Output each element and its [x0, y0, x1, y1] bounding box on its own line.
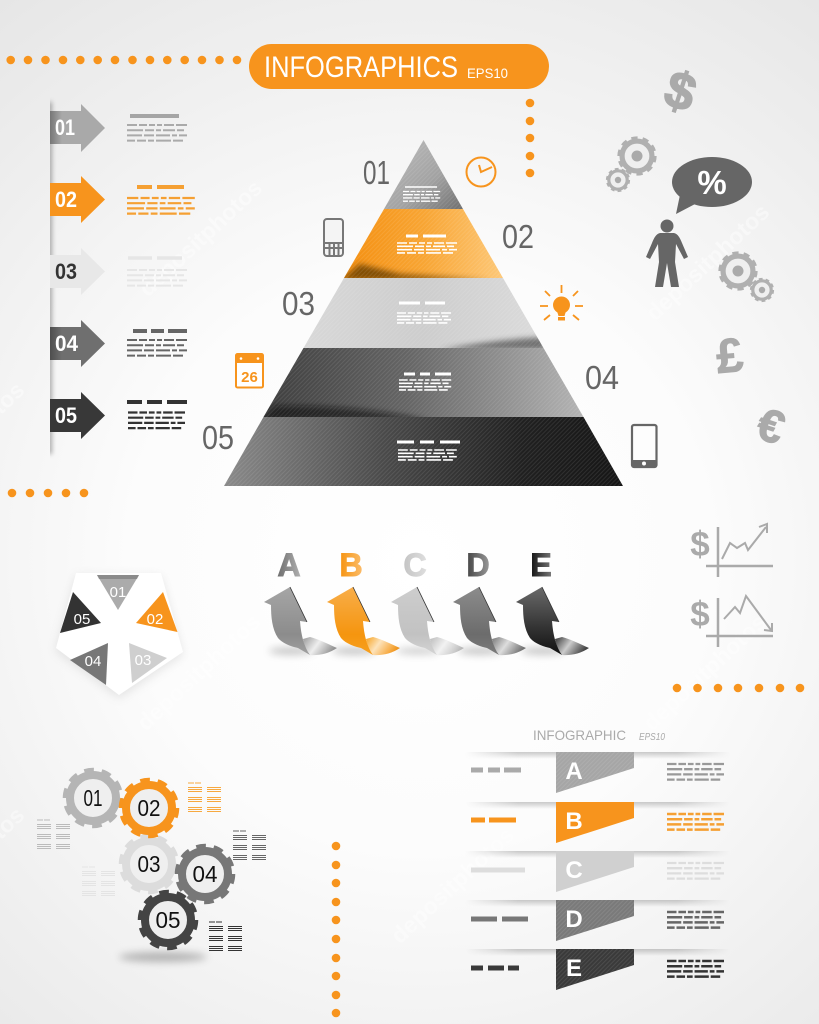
- panel: gears: [37, 770, 266, 962]
- arrow B: [327, 587, 400, 655]
- row E: [471, 949, 724, 990]
- gear 03: [122, 836, 176, 892]
- arrow 01: [50, 104, 105, 152]
- row B: [471, 802, 724, 843]
- gear text block 02: [188, 783, 221, 812]
- gear 04: 04: [192, 861, 218, 887]
- dotted line: top left: [6, 56, 241, 64]
- text block 03: [127, 258, 187, 286]
- gear 05: [140, 892, 196, 948]
- icon: light bulb: [540, 285, 583, 320]
- arrow 04: [50, 320, 105, 367]
- dotted line: right middle: [673, 684, 804, 692]
- icon: chart falling: [690, 595, 773, 647]
- title pill: INFOGRAPHICS: [264, 51, 458, 84]
- watermark text: depositphotos: [638, 609, 771, 736]
- icon: calendar: [236, 354, 263, 388]
- arrow 02: 02: [55, 187, 77, 212]
- icon: mobile phone: [324, 219, 343, 256]
- row D: D: [565, 906, 583, 933]
- icon: tablet: [632, 425, 656, 467]
- pyramid chart: [224, 140, 623, 486]
- panel: numbered arrow list: [47, 102, 195, 454]
- icon: speech bubble with percent: [672, 157, 752, 214]
- watermark text: depositphotos: [388, 393, 521, 520]
- icon: gears right: [720, 253, 773, 301]
- arrow D: [453, 587, 526, 655]
- pyramid label 03: 03: [282, 285, 315, 322]
- row A: A: [565, 758, 583, 785]
- pyramid label 01: 01: [363, 154, 390, 191]
- icon: pound: £: [714, 329, 746, 384]
- icon: chart rising: [690, 524, 773, 577]
- row B: B: [565, 808, 583, 835]
- arrow C: [391, 587, 464, 655]
- panel: letter arrows: [264, 547, 589, 655]
- gear 05: 05: [156, 907, 180, 933]
- segment 01: 01: [110, 584, 126, 601]
- gear text block 04: [233, 831, 266, 860]
- arrow 03: [50, 248, 105, 295]
- gear text block 05: [209, 922, 242, 950]
- icon: euro: €: [751, 397, 791, 454]
- arrow 05: [50, 392, 105, 439]
- letter A: A: [277, 547, 301, 583]
- row C: [471, 851, 724, 892]
- icon: speech bubble with percent: %: [697, 164, 727, 201]
- segment 03: 03: [135, 652, 151, 669]
- arrow 03: 03: [55, 259, 77, 284]
- segment 02: 02: [147, 611, 163, 628]
- text block 04: [127, 331, 187, 356]
- gear text block 03: [82, 867, 115, 896]
- icon: dollar: $: [658, 60, 703, 124]
- segment 04: 04: [85, 653, 101, 670]
- arrow 01: 01: [55, 115, 75, 140]
- icon: person: [646, 220, 688, 287]
- gear 02: 02: [138, 795, 160, 821]
- row D: [471, 900, 724, 941]
- watermark text: depositphotos: [134, 175, 267, 302]
- segment 05: 05: [74, 611, 90, 628]
- gear 01: [66, 770, 120, 826]
- dotted line: bottom vertical: [332, 842, 340, 1017]
- tier 2: [340, 209, 503, 280]
- row A: [471, 752, 724, 793]
- tier 5: [224, 417, 623, 486]
- gear 01: 01: [84, 785, 102, 811]
- row E: E: [566, 955, 582, 982]
- gear 02: [122, 780, 176, 836]
- arrow 04: 04: [55, 331, 79, 356]
- pyramid label 05: 05: [202, 419, 234, 456]
- gear shadow: [119, 952, 207, 962]
- gear text block 01: [37, 820, 70, 848]
- tier 3: [304, 278, 545, 350]
- arrow E: [516, 587, 589, 655]
- tier 1: [384, 140, 463, 209]
- ribbon list heading: EPS10: [639, 732, 665, 743]
- ribbon list heading: INFOGRAPHIC: [533, 727, 626, 743]
- icon: clock: [466, 158, 496, 186]
- icon: gears top: [607, 138, 655, 191]
- text block 05: [127, 402, 187, 428]
- icon: chart falling: $: [690, 595, 710, 634]
- text block 01: [127, 116, 187, 141]
- pyramid label 04: 04: [585, 359, 619, 396]
- watermark text: depositphotos: [132, 609, 265, 736]
- letter E: E: [530, 547, 552, 583]
- dotted line: left middle: [8, 489, 88, 497]
- letter C: C: [403, 547, 427, 583]
- title pill: [249, 44, 549, 89]
- icon: calendar: 26: [241, 369, 258, 386]
- panel: pentagon: [56, 573, 183, 698]
- gear 03: 03: [138, 851, 160, 877]
- letter D: D: [466, 547, 490, 583]
- watermark text: [0, 175, 774, 949]
- panel: ribbon list: [465, 727, 730, 990]
- gear 04: [178, 846, 232, 902]
- row C: C: [565, 857, 583, 884]
- icon: chart rising: $: [690, 525, 710, 564]
- title pill: EPS10: [467, 65, 508, 81]
- arrow 02: [50, 176, 105, 223]
- watermark text: depositphotos: [386, 822, 519, 949]
- arrow 05: 05: [55, 403, 77, 428]
- text block 02: [127, 187, 195, 214]
- watermark text: depositphotos: [641, 199, 774, 326]
- arrow A: [264, 587, 337, 655]
- tier 4: [260, 348, 584, 420]
- pyramid label 02: 02: [502, 218, 534, 255]
- dotted line: below pill: [526, 99, 534, 177]
- letter B: B: [339, 547, 363, 583]
